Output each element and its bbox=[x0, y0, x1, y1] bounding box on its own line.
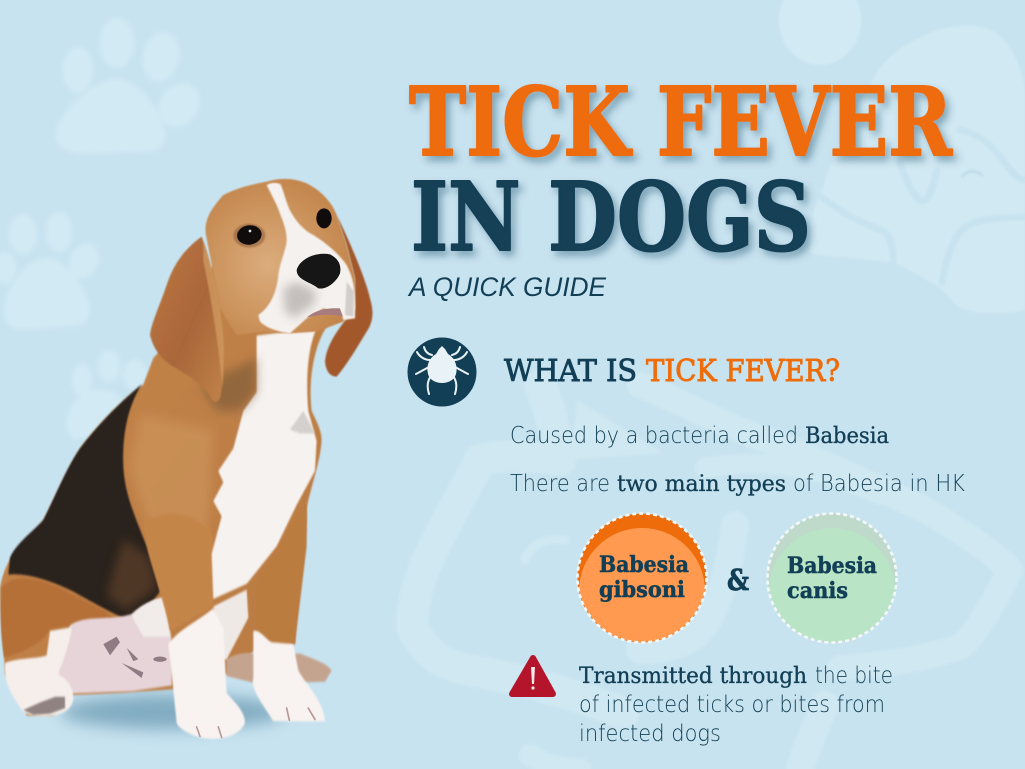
cheek shading right bbox=[345, 282, 354, 317]
mouth bbox=[307, 308, 343, 318]
left eye socket bbox=[233, 224, 265, 248]
head shape bbox=[205, 179, 355, 335]
text: transmission bbox=[579, 663, 893, 747]
text: caused by: Caused by a bacteria called bbox=[510, 423, 798, 449]
front leg white bbox=[168, 608, 245, 739]
muzzle shading bbox=[283, 282, 317, 318]
dog body bbox=[0, 264, 333, 739]
front leg tan bbox=[143, 514, 213, 631]
badge: Babesia canis: canis bbox=[787, 578, 848, 604]
watermark: paw prints bbox=[0, 18, 208, 439]
ground shadow bbox=[60, 695, 287, 729]
title: IN DOGS bbox=[411, 162, 811, 273]
far hind foot bbox=[227, 653, 332, 684]
nose bbox=[297, 254, 340, 289]
saddle brown fringe bbox=[107, 539, 157, 610]
text: two main types: two main types bbox=[617, 472, 786, 497]
text: transmission: of infected ticks or bites from bbox=[579, 692, 885, 718]
text: two main types: of Babesia in HK bbox=[793, 471, 965, 497]
blaze and muzzle bbox=[258, 183, 355, 333]
left eye bbox=[236, 224, 263, 246]
black saddle bbox=[8, 384, 160, 618]
icon: tick bbox=[408, 338, 476, 406]
badge: Babesia canis bbox=[768, 514, 896, 654]
ear fold bbox=[203, 242, 224, 388]
heading: WHAT IS bbox=[504, 354, 637, 389]
dog head bbox=[150, 179, 372, 402]
text: transmission: Transmitted through bbox=[579, 664, 807, 689]
subtitle: A QUICK GUIDE bbox=[407, 272, 607, 302]
far ear bbox=[325, 215, 372, 377]
rear leg and paw bbox=[5, 627, 73, 716]
body silhouette bbox=[0, 264, 333, 716]
heading: TICK FEVER? bbox=[646, 354, 840, 389]
eye glint bbox=[249, 230, 251, 232]
text: two main types: There are bbox=[510, 471, 610, 497]
text: transmission: the bite bbox=[815, 663, 893, 689]
chest shading bbox=[290, 411, 315, 433]
belly spots bbox=[103, 637, 167, 678]
right leg tan bbox=[257, 501, 307, 644]
near ear bbox=[150, 237, 223, 402]
haunch bbox=[1, 578, 113, 657]
badge: Babesia gibsoni: gibsoni bbox=[599, 577, 685, 603]
neck shadow bbox=[200, 358, 257, 411]
rear paw pads bbox=[23, 697, 65, 715]
badge: Babesia gibsoni: Babesia bbox=[599, 552, 689, 578]
text: caused by: Babesia bbox=[805, 424, 889, 449]
badge: Babesia canis: Babesia bbox=[787, 553, 877, 579]
text: transmission: infected dogs bbox=[579, 721, 721, 747]
dog photo illustration bbox=[0, 179, 372, 739]
ampersand: & bbox=[727, 563, 749, 597]
belly bbox=[57, 597, 172, 694]
text: two main types bbox=[510, 471, 965, 497]
inner white leg bbox=[213, 590, 248, 659]
paw toes bbox=[197, 708, 315, 737]
watermark: large dog outline bbox=[412, 0, 1025, 769]
right eye bbox=[316, 208, 332, 228]
badge: Babesia gibsoni bbox=[578, 514, 706, 654]
belly white tuft bbox=[132, 597, 170, 637]
title bbox=[409, 67, 953, 273]
shoulder highlight bbox=[130, 415, 213, 546]
right leg white bbox=[253, 631, 325, 721]
heading bbox=[504, 354, 840, 389]
chest white bbox=[212, 328, 317, 599]
icon: warning bbox=[512, 658, 553, 694]
